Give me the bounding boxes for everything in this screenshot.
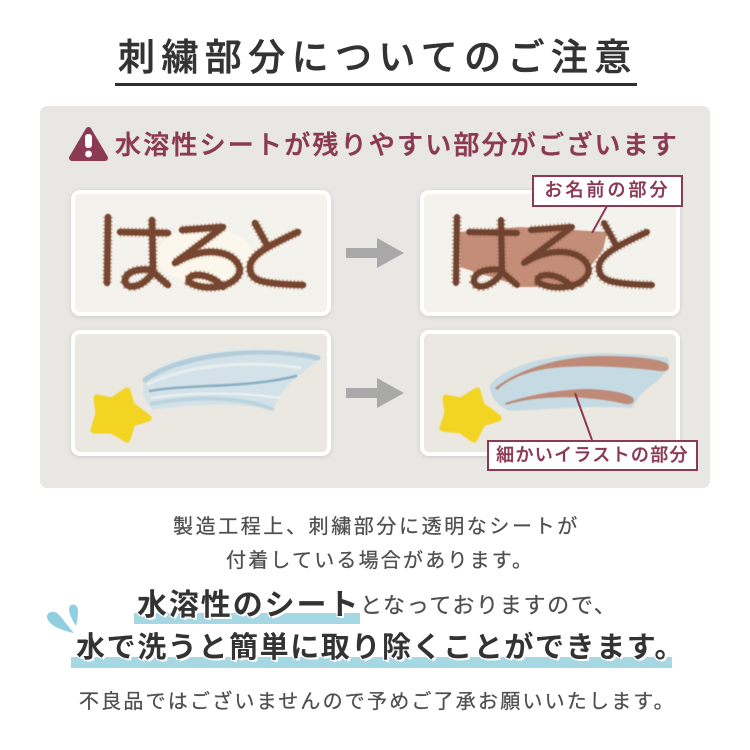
body text: line 3 remainder: となっておりますので、 xyxy=(360,593,617,618)
star xyxy=(443,391,498,439)
panel: warning xyxy=(40,106,710,488)
emphasis: water-soluble sheet: 水溶性のシート xyxy=(137,589,360,622)
body text: closing note: 不良品ではございませんので予めご了承お願いいたします。 xyxy=(79,691,676,713)
body text: line 1: 製造工程上、刺繍部分に透明なシートが xyxy=(173,516,580,538)
title underline xyxy=(115,83,637,86)
highlight: first xyxy=(134,613,360,624)
arrow: top xyxy=(346,238,404,268)
comet tail xyxy=(143,349,320,410)
photo: name embroidery with sheet xyxy=(420,190,680,316)
title: 刺繍部分についてのご注意 xyxy=(118,37,638,78)
warning heading: 水溶性シートが残りやすい部分がございます xyxy=(115,130,679,160)
star xyxy=(94,391,148,439)
icon: warning triangle xyxy=(69,127,108,161)
callout: name part: お名前の部分 xyxy=(544,180,670,200)
photo: comet embroidery before xyxy=(71,330,331,456)
arrow: bottom xyxy=(346,378,404,408)
photo: comet embroidery with sheet xyxy=(420,330,680,456)
comet tail xyxy=(490,353,669,411)
highlight: second xyxy=(71,657,672,668)
emphasis: washable: 水で洗うと簡単に取り除くことができます。 xyxy=(76,632,685,664)
icon: water drops xyxy=(47,604,78,633)
photo: name embroidery before xyxy=(71,190,331,316)
callout: illustration part: 細かいイラストの部分 xyxy=(496,445,689,465)
sheet strips xyxy=(495,356,669,390)
callout: name part xyxy=(532,175,683,207)
body text: line 2: 付着している場合があります。 xyxy=(226,550,534,572)
callout: illustration part xyxy=(487,440,698,471)
